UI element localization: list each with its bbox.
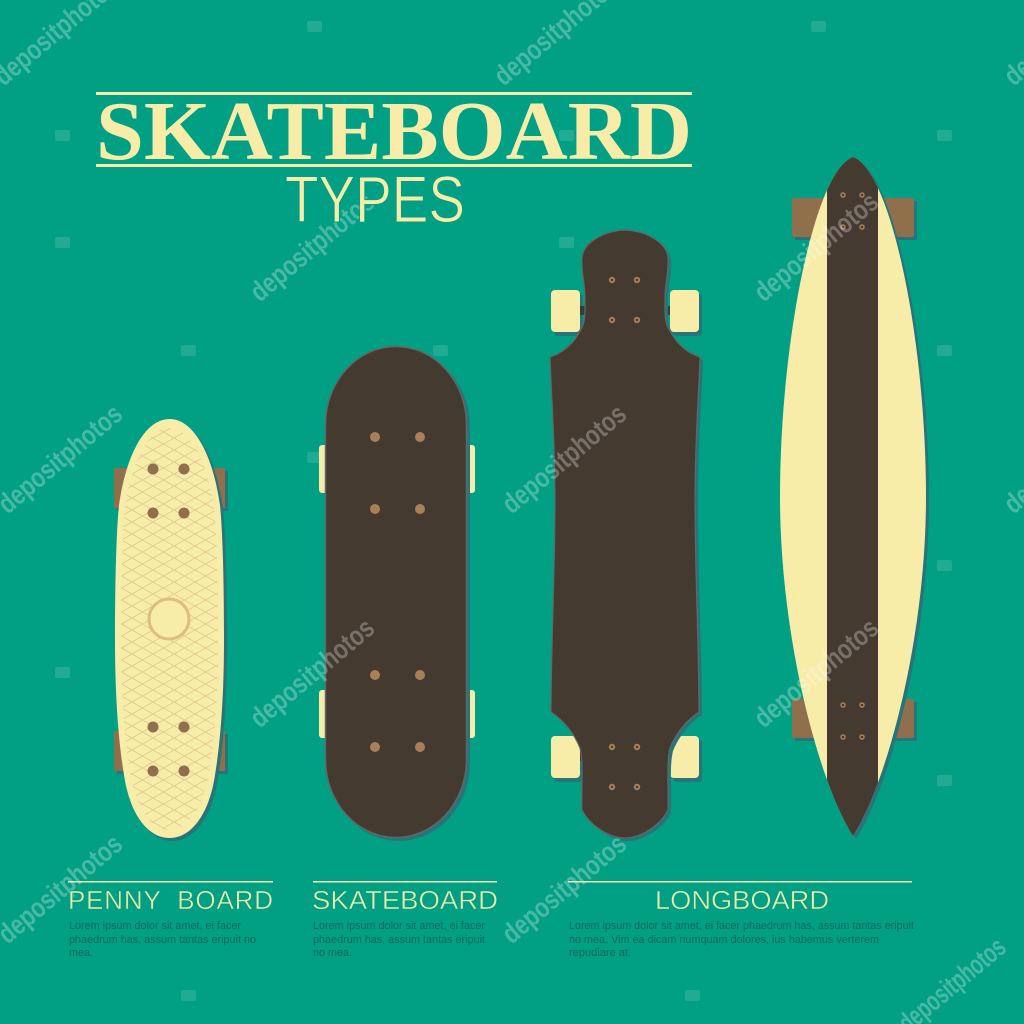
skateboard (319, 346, 475, 841)
penny grip lattice (121, 428, 218, 830)
watermark pattern: depositphotos (244, 186, 380, 307)
description: longboard: repudiare at. (569, 947, 631, 959)
subtitle: TYPES (285, 162, 465, 236)
penny board (114, 419, 228, 841)
label: penny board (68, 881, 273, 959)
pintail shadow (783, 160, 929, 839)
pintail trucks (792, 198, 914, 738)
penny centre circle (149, 599, 189, 639)
longboard screws (610, 278, 639, 789)
description: skateboard: no mea. (313, 947, 352, 959)
watermark overlay: depositphotos (244, 612, 380, 733)
watermark pattern (0, 0, 1024, 519)
longboard wheels (551, 290, 699, 778)
skateboard wheels (319, 445, 475, 738)
description: penny board: phaedrum has, assum tantas eripuit no (69, 934, 256, 946)
penny screws (148, 464, 190, 776)
description: skateboard: Lorem ipsum dolor sit amet, ei facer (313, 920, 485, 932)
penny trucks (114, 468, 225, 771)
label: skateboard (312, 881, 498, 959)
description: skateboard (313, 920, 485, 959)
watermark overlay: depositphotos (748, 186, 884, 307)
heading: longboard: LONGBOARD (655, 885, 829, 915)
longboard (550, 230, 703, 841)
description: penny board: Lorem ipsum dolor sit amet, ei facer (69, 920, 241, 932)
penny deck (115, 419, 224, 838)
description: longboard (569, 920, 914, 959)
penny trucks shadow (117, 471, 228, 774)
skateboard shadow (328, 349, 470, 841)
label: longboard (568, 881, 914, 959)
description: penny board (69, 920, 256, 959)
longboard wheel shadows (554, 293, 702, 782)
pintail deck (780, 157, 926, 836)
watermark overlay: depositphotos (496, 398, 632, 519)
longboard deck (550, 230, 700, 838)
description: longboard: Lorem ipsum dolor sit amet, ei facer phaedrum has, assum tantas eripuit (569, 920, 914, 932)
pintail longboard (780, 150, 929, 840)
heading: penny board: PENNY BOARD (68, 885, 273, 915)
skateboard deck (326, 346, 466, 838)
description: skateboard: phaedrum has, assum tantas eripuit (313, 934, 485, 946)
penny shadow (118, 422, 227, 841)
heading: skateboard: SKATEBOARD (312, 885, 498, 915)
pintail centre stripe (827, 150, 878, 840)
description: longboard: no mea. Vim ea dicam numquam dolores, ius habemus verterem (569, 934, 879, 946)
longboard shadow (553, 233, 703, 841)
watermark overlay: depositphotos (748, 612, 884, 733)
watermark overlay: depositphotos (496, 828, 632, 949)
skateboard screws (370, 432, 425, 752)
longboard axle stubs (580, 306, 670, 761)
pintail trucks shadow (795, 201, 917, 741)
title rules (96, 92, 692, 167)
title: SKATEBOARD (96, 85, 692, 178)
description: penny board: mea. (69, 947, 93, 959)
pintail screws (841, 193, 864, 739)
